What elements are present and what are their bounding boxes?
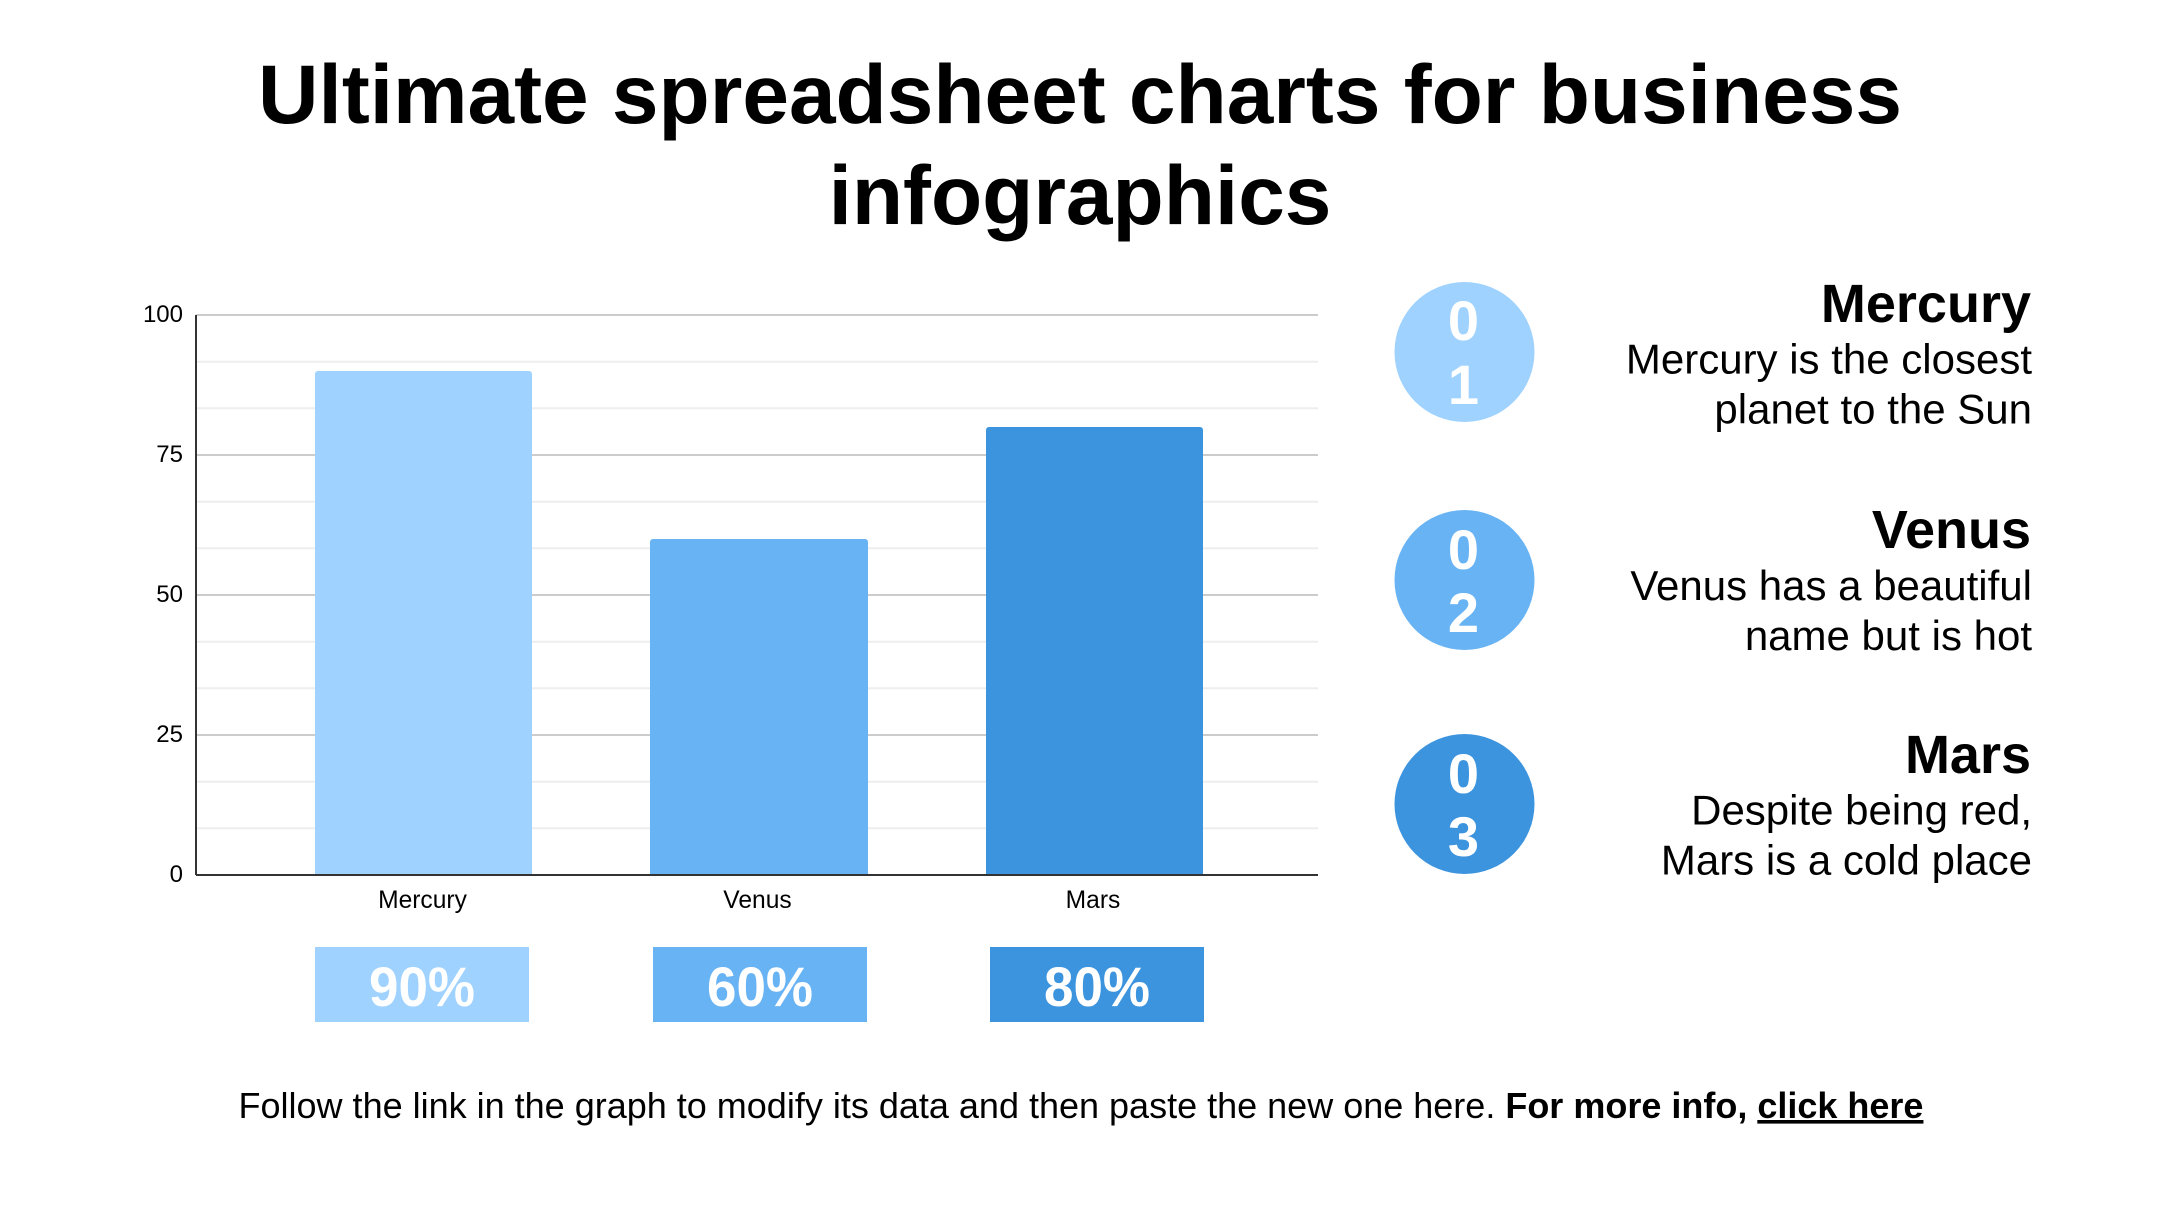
value box: 80%: 80% <box>1044 955 1150 1018</box>
item text: Venus <box>1630 500 2032 659</box>
bar chart <box>143 301 1318 914</box>
number badge 03: 0 <box>1448 742 1479 805</box>
title <box>258 47 1902 242</box>
item text: Mercury: planet to the Sun <box>1714 386 2032 432</box>
item text: Mars: Mars <box>1905 725 2031 785</box>
title: infographics <box>829 148 1331 242</box>
number badge 03 <box>1394 734 1534 874</box>
y axis: 100 <box>143 301 183 328</box>
value box: 90%: 90% <box>369 955 475 1018</box>
number badge 03: 3 <box>1448 805 1479 868</box>
number badge 02: 0 <box>1448 518 1479 581</box>
x axis: Mars <box>1066 887 1120 914</box>
value box: 60% <box>653 947 867 1022</box>
y axis: 0 <box>170 861 183 888</box>
item text: Venus: Venus has a beautiful <box>1630 562 2032 609</box>
bar: Mars <box>986 427 1203 875</box>
item text: Mars: Mars is a cold place <box>1661 836 2032 884</box>
item text: Mercury: Mercury is the closest <box>1626 336 2032 382</box>
item text: Venus: Venus <box>1872 500 2031 560</box>
x axis <box>196 875 1318 914</box>
value box: 60%: 60% <box>707 955 813 1018</box>
y axis: 25 <box>156 721 183 748</box>
number badge 01 <box>1394 282 1534 422</box>
value box: 90% <box>315 947 529 1022</box>
number badge 02: 2 <box>1448 581 1479 644</box>
item text: Mercury: Mercury <box>1821 274 2031 334</box>
y axis: 50 <box>156 581 183 608</box>
y axis <box>143 301 196 888</box>
value box: 80% <box>990 947 1204 1022</box>
item text: Venus: name but is hot <box>1745 612 2032 659</box>
item text: Mars: Despite being red, <box>1691 786 2032 834</box>
item text: Mars <box>1661 725 2032 884</box>
number badge 02 <box>1394 510 1534 650</box>
x axis: Mercury <box>378 887 468 914</box>
bar: Venus <box>650 539 868 875</box>
item text: Mercury <box>1626 274 2032 432</box>
number badge 01: 0 <box>1448 289 1479 352</box>
title: Ultimate spreadsheet charts for business <box>258 47 1902 141</box>
bar: Mercury <box>315 371 532 875</box>
x axis: Venus <box>723 887 792 914</box>
y axis: 75 <box>156 441 183 468</box>
footer note: Follow the link in the graph to modify its data and then paste the new one here. For more info, click here <box>239 1085 1923 1126</box>
number badge 01: 1 <box>1448 353 1479 416</box>
